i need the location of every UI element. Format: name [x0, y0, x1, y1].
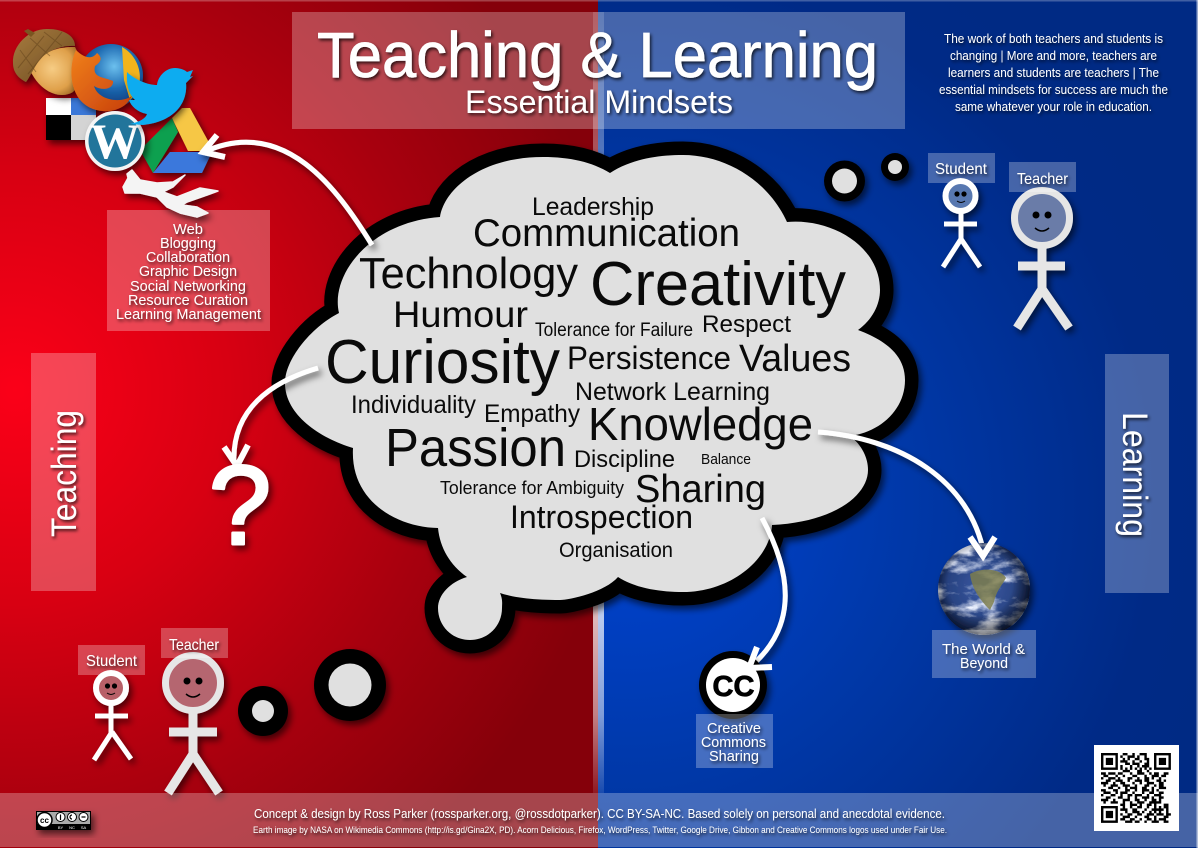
- intro text block: [939, 32, 1168, 114]
- arrowhead on creative commons: [749, 647, 772, 668]
- red teacher figure: [161, 628, 228, 793]
- panel: learning label: Learning: [1115, 412, 1154, 537]
- panel: technology list: Blogging: [160, 235, 216, 252]
- red student figure: Student: [86, 653, 138, 670]
- panel: technology list: Learning Management: [116, 306, 262, 323]
- word cloud: Creativity: [590, 250, 846, 319]
- panel: learning label: [1105, 354, 1169, 593]
- intro text block: essential mindsets for success are much the: [939, 83, 1168, 97]
- footer band: [0, 793, 1198, 847]
- word cloud: Technology: [359, 249, 578, 298]
- title panel: [292, 12, 905, 129]
- icon: flying figure: [123, 170, 218, 217]
- arrowhead on earth: [970, 537, 995, 556]
- credits text: Earth image by NASA on Wikimedia Commons (http://is.gd/Gina2X, PD). Acorn Delicious, Firefox, WordPress, Twitter, Google Drive, Gibbon and Creative Commons logos used under Fair Use.: [253, 825, 947, 836]
- icon: CC BY-NC-SA badge: BY: [58, 825, 63, 830]
- icon: creative commons: CC: [713, 671, 754, 703]
- thought cloud: [285, 155, 905, 640]
- arrow: knowledge to world: [818, 432, 984, 554]
- red student figure: [78, 645, 145, 760]
- panel: technology list: [107, 210, 270, 331]
- intro text block: same whatever your role in education.: [955, 100, 1152, 114]
- icon: CC BY-NC-SA badge: [36, 811, 91, 830]
- title: Teaching & Learning: [317, 19, 878, 91]
- panel: teaching label: [31, 353, 96, 591]
- icon: CC BY-NC-SA badge: cc: [40, 816, 49, 825]
- background: red teaching half: [0, 0, 598, 848]
- word cloud: Humour: [393, 294, 528, 335]
- panel: creative commons caption: [696, 714, 773, 768]
- blue teacher figure: Teacher: [1017, 171, 1069, 188]
- red thought bubble: large: [314, 649, 386, 721]
- word cloud: Communication: [473, 212, 740, 255]
- icon: acorn: [13, 29, 79, 95]
- web logos cluster: [13, 29, 218, 217]
- word cloud: Persistence: [567, 340, 731, 376]
- icon: CC BY-NC-SA badge: SA: [81, 825, 86, 830]
- word cloud: Curiosity: [325, 328, 560, 397]
- icon: CC BY-NC-SA badge: NC: [69, 825, 75, 830]
- arrow: sharing to creative commons: [750, 518, 785, 667]
- panel: technology list: Collaboration: [146, 249, 230, 266]
- panel: creative commons caption: Creative: [707, 720, 761, 737]
- word cloud: Passion: [385, 418, 566, 478]
- word cloud: Balance: [701, 451, 751, 468]
- intro text block: changing | More and more, teachers are: [950, 49, 1157, 63]
- blue thought bubble: small: [881, 153, 909, 181]
- icon: twitter bird: [127, 68, 193, 125]
- blue teacher figure: [1009, 162, 1076, 328]
- panel: teaching label: Teaching: [45, 410, 84, 537]
- icon: wordpress: W: [90, 113, 140, 169]
- word cloud: Empathy: [484, 400, 580, 428]
- icon: earth: [938, 543, 1030, 635]
- panel: technology list: Web: [173, 221, 203, 238]
- word cloud: Discipline: [574, 446, 675, 473]
- blue thought bubble: large: [824, 160, 865, 202]
- background: blue learning half: [598, 0, 1198, 848]
- intro text block: The work of both teachers and students is: [944, 32, 1163, 46]
- icon: firefox: [71, 44, 143, 111]
- word cloud: Leadership: [532, 193, 654, 221]
- subtitle: Essential Mindsets: [465, 84, 733, 120]
- icon: question mark: ?: [209, 443, 271, 568]
- icon: google drive: [140, 108, 212, 173]
- blue student figure: Student: [935, 161, 988, 178]
- arrow: technology to logos: [203, 135, 372, 245]
- credits text: Concept & design by Ross Parker (rossparker.org, @rossdotparker). CC BY-SA-NC. Based solely on personal and anecdotal evidence.: [254, 807, 945, 821]
- panel: world caption: Beyond: [960, 655, 1008, 672]
- panel: world caption: The World &: [942, 641, 1025, 658]
- red thought bubble: small: [238, 686, 288, 736]
- word cloud: [325, 193, 851, 562]
- credits text: [253, 807, 947, 836]
- word cloud: Individuality: [351, 391, 476, 419]
- word cloud: Values: [739, 338, 851, 380]
- icon: creative commons: [699, 651, 767, 719]
- word cloud: Tolerance for Failure: [535, 320, 693, 341]
- word cloud: Introspection: [510, 499, 693, 535]
- word cloud: Network Learning: [575, 378, 770, 406]
- QR code: [1094, 745, 1179, 831]
- red teacher figure: Teacher: [169, 637, 220, 654]
- panel: world caption: [932, 630, 1036, 678]
- panel: technology list: Social Networking: [130, 278, 246, 295]
- arrow: curiosity to question mark: [224, 368, 318, 466]
- panel: creative commons caption: Sharing: [709, 748, 759, 765]
- word cloud: Organisation: [559, 539, 673, 562]
- icon: gibbon checkerboard: [46, 98, 96, 140]
- word cloud: Respect: [702, 311, 791, 338]
- title: [317, 19, 878, 120]
- word cloud: Tolerance for Ambiguity: [440, 478, 624, 498]
- word cloud: Sharing: [635, 468, 766, 511]
- panel: creative commons caption: Commons: [701, 734, 766, 751]
- panel: technology list: Graphic Design: [139, 263, 237, 280]
- panel: technology list: Resource Curation: [128, 292, 248, 309]
- word cloud: Knowledge: [588, 398, 813, 450]
- blue student figure: [928, 153, 995, 267]
- intro text block: learners and students are teachers | The: [948, 66, 1159, 80]
